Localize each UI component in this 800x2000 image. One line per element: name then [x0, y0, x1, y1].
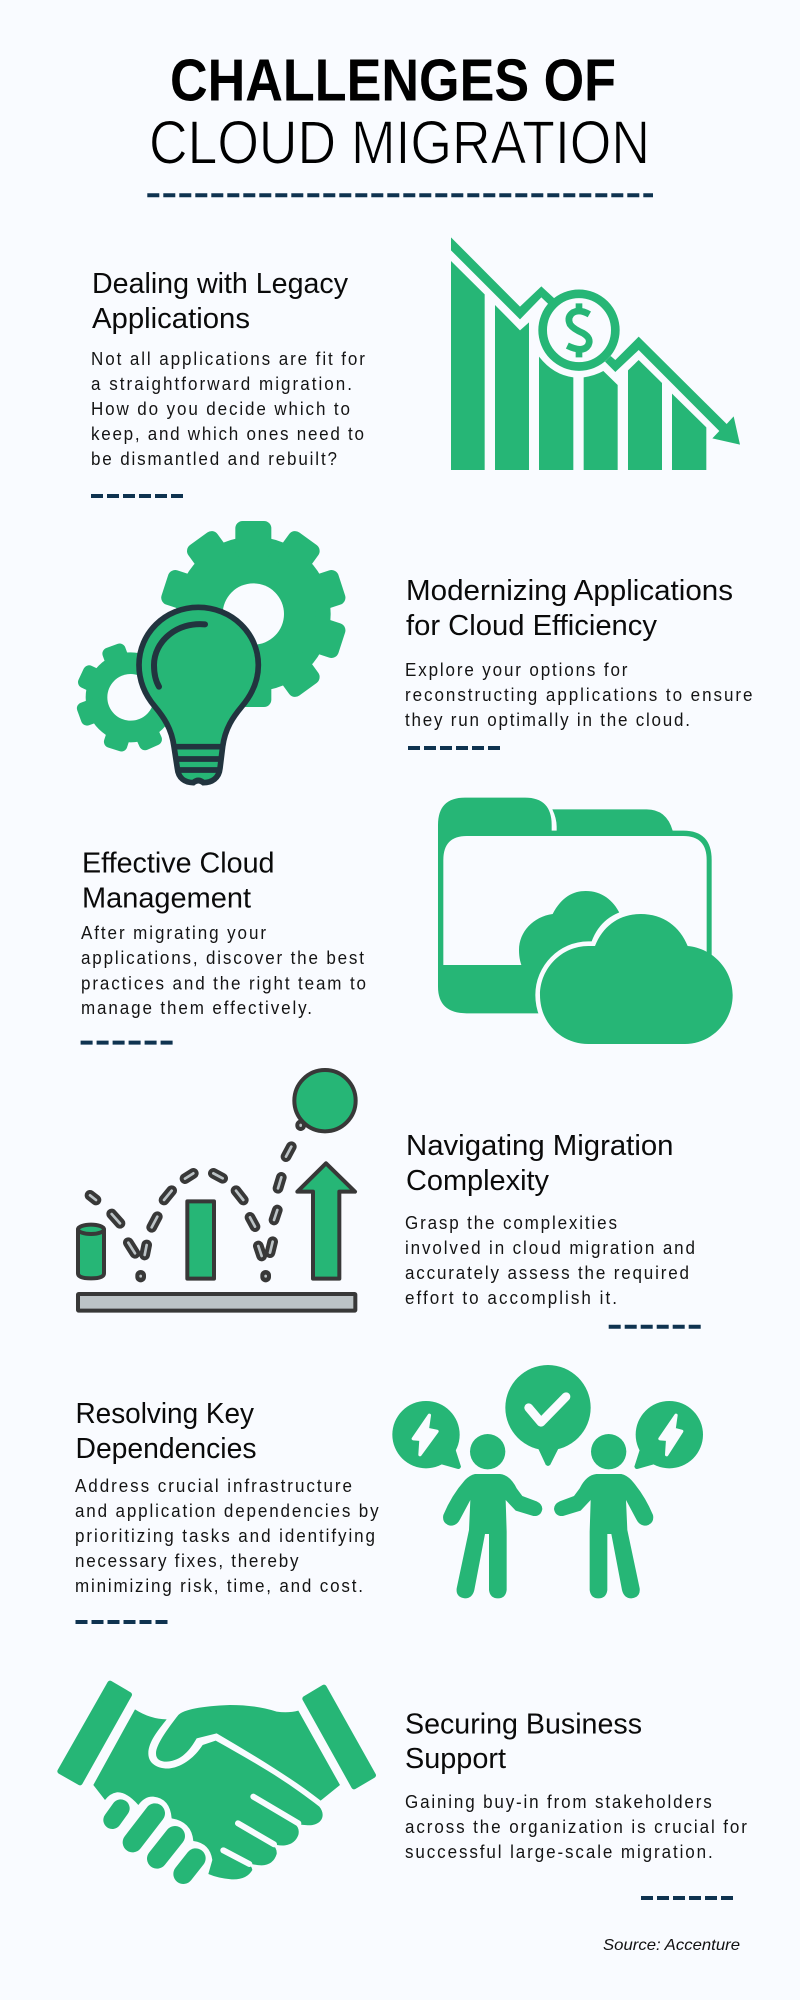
icon: two people with speech bubbles — [392, 1365, 703, 1598]
title — [149, 48, 650, 177]
icon: bouncing ball over bars — [78, 1070, 356, 1311]
heading: dependencies — [76, 1398, 256, 1465]
text block: dependencies: minimizing risk, time, and cost. — [75, 1575, 363, 1596]
text block: support: successful large-scale migration. — [405, 1841, 713, 1862]
text block: modernizing: reconstructing applications to ensure — [405, 684, 753, 705]
text block: management: applications, discover the best — [81, 947, 364, 968]
source note: Source: Accenture — [603, 1937, 740, 1954]
panel: securing business support — [60, 1683, 747, 1898]
heading: management: Effective Cloud — [82, 848, 274, 880]
text block: management: After migrating your — [81, 922, 266, 943]
heading: legacy — [92, 268, 348, 335]
text block: modernizing: they run optimally in the cloud. — [405, 709, 690, 730]
title: CLOUD MIGRATION — [149, 109, 650, 177]
heading: modernizing: for Cloud Efficiency — [406, 610, 657, 642]
heading: legacy: Applications — [92, 303, 250, 335]
text block: support: Gaining buy-in from stakeholders — [405, 1791, 712, 1812]
text block: dependencies: Address crucial infrastructure — [75, 1475, 352, 1496]
heading: complexity — [406, 1130, 674, 1197]
text block: support: across the organization is crucial for — [405, 1816, 747, 1837]
text block: complexity — [405, 1212, 695, 1308]
heading: management — [82, 848, 274, 915]
text block: legacy: be dismantled and rebuilt? — [91, 448, 337, 469]
heading: dependencies: Dependencies — [76, 1433, 256, 1465]
heading: support: Securing Business — [405, 1708, 642, 1740]
icon: falling chart with dollar — [451, 237, 740, 470]
heading: management: Management — [82, 883, 251, 915]
text block: complexity: Grasp the complexities — [405, 1212, 617, 1233]
text block: dependencies: prioritizing tasks and identifying — [75, 1525, 375, 1546]
icon: folder with clouds — [438, 798, 733, 1044]
text block: support — [405, 1791, 747, 1862]
text block: complexity: effort to accomplish it. — [405, 1287, 617, 1308]
title: CHALLENGES OF — [170, 48, 616, 114]
text block: management: practices and the right team to — [81, 973, 366, 993]
text block: legacy: a straightforward migration. — [91, 373, 352, 394]
text block: modernizing — [405, 659, 753, 730]
text block: legacy: keep, and which ones need to — [91, 423, 364, 444]
heading: legacy: Dealing with Legacy — [92, 268, 348, 300]
heading: modernizing: Modernizing Applications — [406, 575, 733, 607]
heading: support — [405, 1708, 642, 1775]
panel: navigating migration complexity — [78, 1070, 701, 1327]
text block: complexity: involved in cloud migration and — [405, 1237, 695, 1258]
panel: dealing with legacy applications — [91, 237, 740, 496]
panel: effective cloud management — [81, 798, 733, 1044]
icon: handshake — [60, 1683, 373, 1879]
heading: modernizing — [406, 575, 733, 642]
heading: complexity: Navigating Migration — [406, 1130, 674, 1162]
text block: management — [81, 922, 366, 1018]
text block: dependencies — [75, 1475, 379, 1596]
text block: modernizing: Explore your options for — [405, 659, 628, 680]
text block: management: manage them effectively. — [81, 997, 312, 1018]
heading: complexity: Complexity — [406, 1165, 549, 1197]
text block: dependencies: and application dependencies by — [75, 1500, 379, 1521]
icon: gears and light bulb — [75, 521, 347, 783]
heading: dependencies: Resolving Key — [76, 1398, 254, 1430]
panel: modernizing applications — [75, 521, 753, 783]
text block: legacy: How do you decide which to — [91, 398, 350, 419]
text block: legacy — [91, 348, 365, 469]
text block: complexity: accurately assess the required — [405, 1262, 689, 1283]
heading: support: Support — [405, 1743, 506, 1775]
text block: dependencies: necessary fixes, thereby — [75, 1550, 299, 1571]
panel: resolving key dependencies — [75, 1365, 703, 1622]
text block: legacy: Not all applications are fit for — [91, 348, 365, 369]
